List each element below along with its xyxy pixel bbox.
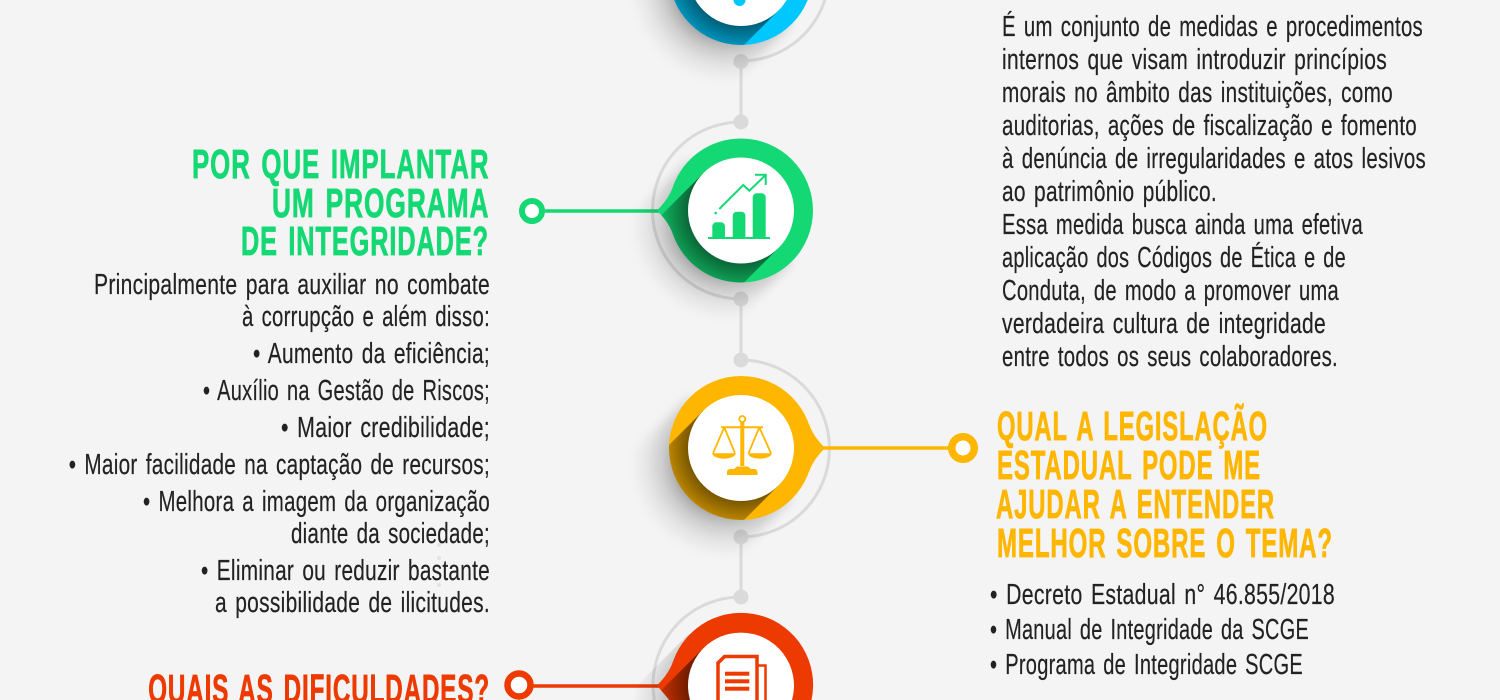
- icon: scales of justice: [712, 416, 772, 475]
- connector: red: [508, 674, 662, 696]
- node: blue: [641, 0, 808, 74]
- heading: legislação: [996, 403, 1333, 566]
- node: green chart: [640, 138, 813, 312]
- text block: legislation list: • Decreto Estadual n° 46.855/2018: [990, 579, 1335, 611]
- text block: definition: entre todos os seus colaboradores.: [1002, 341, 1338, 373]
- text block: reasons: à corrupção e além disso:: [242, 301, 490, 333]
- text block: definition: verdadeira cultura de integridade: [1002, 308, 1326, 340]
- text block: reasons: • Aumento da eficiência;: [253, 338, 490, 370]
- text block: reasons: • Melhora a imagem da organização: [143, 486, 490, 518]
- text block: legislation list: [990, 579, 1335, 681]
- text block: reasons: Principalmente para auxiliar no combate: [94, 269, 490, 301]
- heading: legislação: ESTADUAL PODE ME: [997, 442, 1261, 488]
- heading: por que implantar: [192, 141, 490, 264]
- heading: por que implantar: DE INTEGRIDADE?: [241, 218, 489, 264]
- text block: reasons: a possibilidade de ilicitudes.: [215, 587, 490, 619]
- connector: green: [522, 201, 662, 221]
- text block: reasons: diante da sociedade;: [291, 518, 490, 550]
- faint marks: [437, 543, 441, 587]
- text block: definition: ao patrimônio público.: [1002, 176, 1217, 208]
- icon: documents: [718, 656, 766, 700]
- heading: por que implantar: UM PROGRAMA: [272, 180, 490, 226]
- text block: legislation list: • Programa de Integridade SCGE: [990, 649, 1303, 681]
- text block: definition: aplicação dos Códigos de Ética e de: [1002, 241, 1346, 274]
- text block: reasons: • Auxílio na Gestão de Riscos;: [203, 375, 490, 407]
- text block: reasons: • Maior facilidade na captação de recursos;: [69, 449, 490, 481]
- text block: reasons: • Eliminar ou reduzir bastante: [201, 555, 490, 587]
- text block: reasons: • Maior credibilidade;: [281, 412, 490, 444]
- timeline spine: [653, 0, 829, 700]
- text block: definition: Conduta, de modo a promover uma: [1002, 275, 1339, 307]
- node: yellow scales: [640, 376, 824, 549]
- heading: legislação: AJUDAR A ENTENDER: [996, 481, 1275, 527]
- icon: rising bar chart: [708, 175, 770, 239]
- text block: legislation list: • Manual de Integridade da SCGE: [990, 614, 1309, 646]
- heading: por que implantar: POR QUE IMPLANTAR: [192, 141, 490, 187]
- text block: definition: [1002, 10, 1426, 373]
- connector: yellow: [820, 437, 974, 459]
- heading: legislação: QUAL A LEGISLAÇÃO: [997, 403, 1268, 449]
- node: red document: [622, 613, 813, 700]
- text block: reasons: [69, 269, 490, 619]
